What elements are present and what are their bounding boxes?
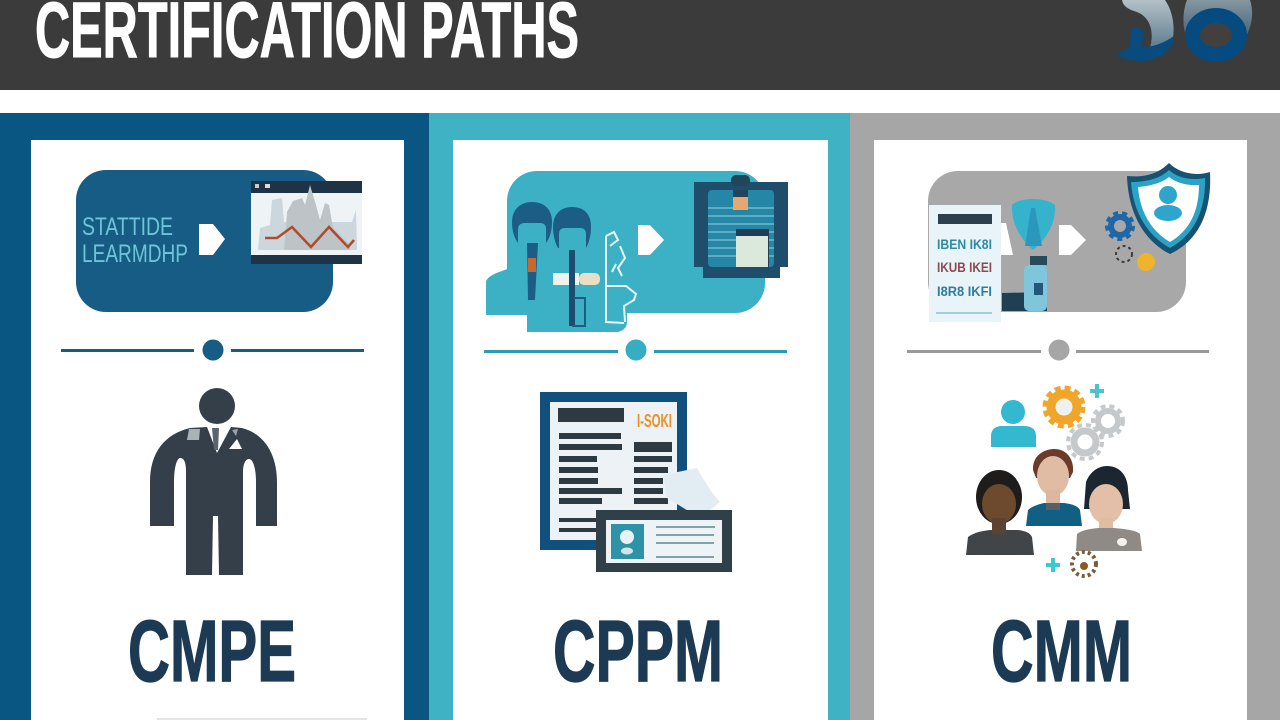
panel: CMPE: [0, 113, 429, 720]
line chart window: [251, 181, 362, 264]
label: CPPM: CPPM: [553, 603, 723, 700]
gray gears: [1068, 406, 1123, 459]
document row two: IKUB IKEI: [937, 259, 992, 275]
sparkle top: [1090, 384, 1104, 398]
divider: [484, 340, 787, 360]
tile label line two: LEARMDHP: [82, 240, 188, 268]
arrow: [1059, 225, 1086, 255]
label: CMM: CMM: [991, 603, 1132, 700]
orange badge text: I-SOKI: [637, 411, 672, 431]
icon: team and gears: [966, 384, 1142, 576]
two advisor figures: [486, 202, 636, 332]
icon: logo: [1118, 0, 1252, 61]
team tile: [486, 171, 788, 332]
panel: CPPM: [429, 113, 850, 720]
bottle with badge: [1001, 199, 1055, 311]
document window: [694, 175, 788, 278]
man centre: [1026, 449, 1082, 526]
icon: shield: [1127, 163, 1210, 254]
panel: CMM: [850, 113, 1280, 720]
tile label: STATTIDE: [82, 213, 173, 241]
orange gear: [1045, 388, 1083, 426]
id card: [596, 510, 732, 572]
woman left: [966, 470, 1034, 555]
checklist document: [929, 205, 1001, 322]
divider: [61, 340, 364, 360]
teal person: [991, 400, 1036, 447]
icon: person in suit: [150, 388, 277, 575]
document row three: I8R8 IKFI: [937, 283, 992, 299]
divider: [907, 340, 1209, 360]
header band: [0, 0, 1280, 90]
woman right: [1076, 466, 1142, 551]
sparkle bottom: [1046, 558, 1060, 572]
arrow: [199, 224, 225, 255]
compliance tile: [928, 163, 1210, 322]
brown gear cluster: [1072, 552, 1096, 576]
icon: resume documents: [540, 392, 732, 572]
document row one: IBEN IK8I: [937, 236, 992, 252]
strategic leadership tile: [76, 170, 362, 312]
arrow: [638, 225, 664, 255]
gear: blue: [1107, 213, 1133, 239]
label: CMPE: CMPE: [128, 603, 296, 700]
